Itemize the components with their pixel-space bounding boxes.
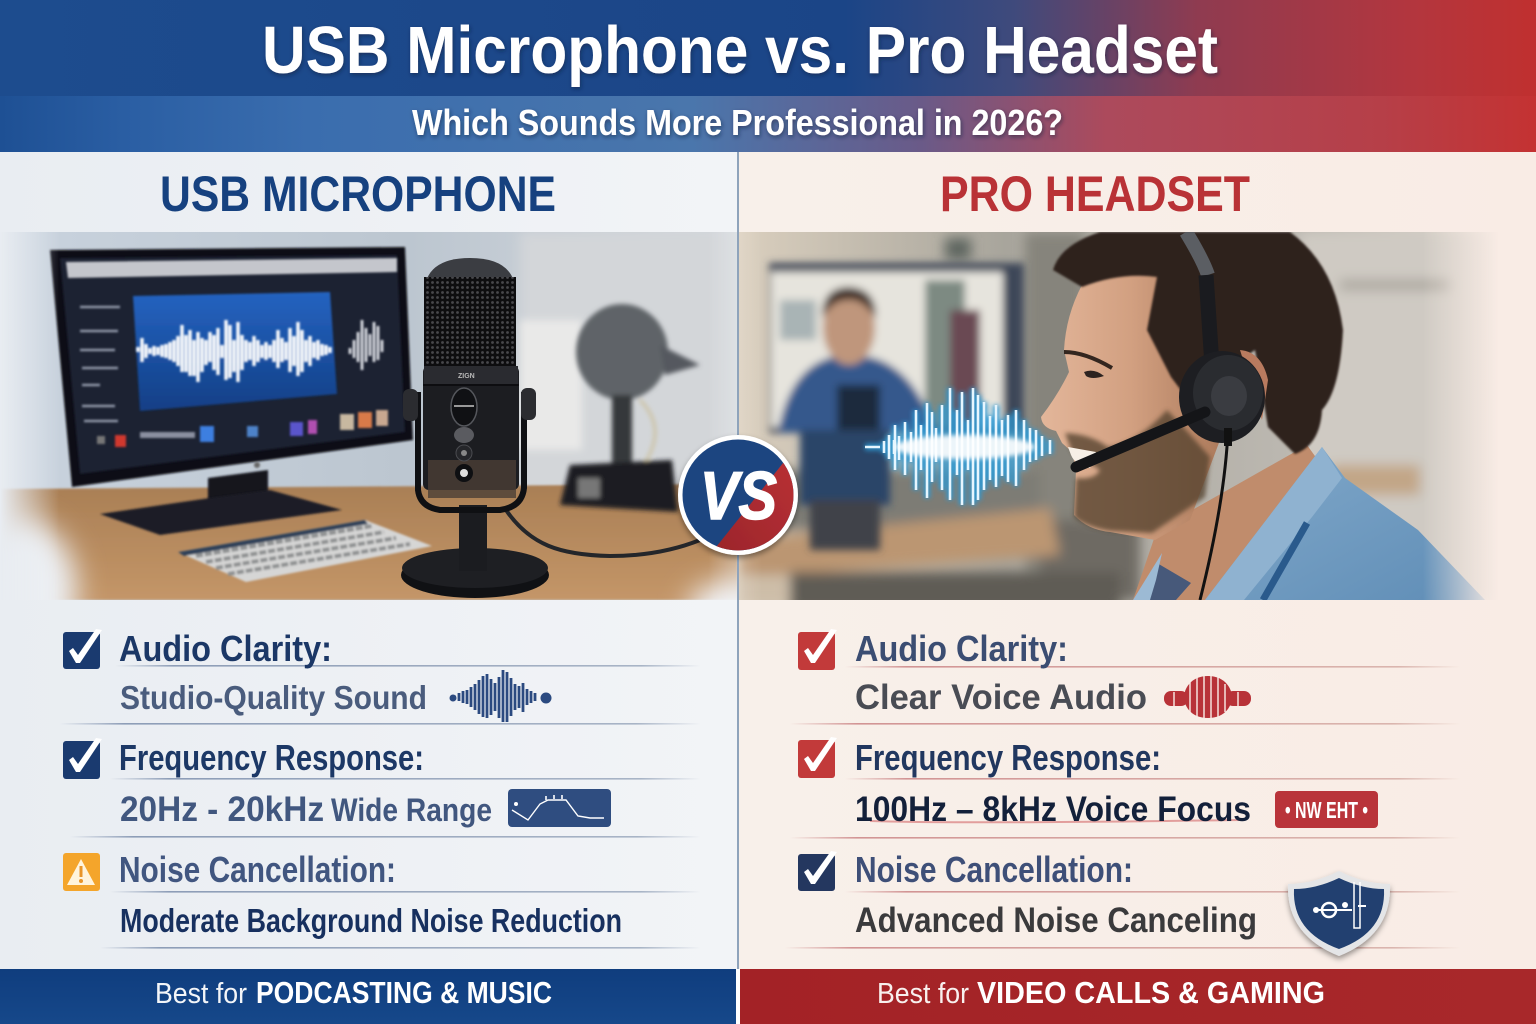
- title: USB Microphone vs. Pro Headset: [262, 13, 1218, 88]
- row: noise cancellation: Advanced Noise Canceling: [855, 901, 1257, 940]
- icon: check: [798, 629, 837, 670]
- icon: check: [798, 737, 837, 778]
- header banner: [0, 0, 1536, 152]
- USB microphone: ZIGN: [458, 373, 475, 380]
- row: frequency response: 100Hz – 8kHz Voice Focus: [855, 790, 1251, 829]
- badge: [1275, 791, 1378, 828]
- panel: Pro headset: [739, 152, 1536, 1024]
- monitor: [50, 247, 413, 535]
- icon: headset: [1076, 232, 1265, 600]
- VS badge: VS: [700, 458, 777, 534]
- footer: best for podcasting and music: [0, 969, 736, 1024]
- row: audio clarity: Studio-Quality Sound: [120, 679, 427, 716]
- panel: USB microphone: [0, 152, 788, 1024]
- subtitle: Which Sounds More Professional in 2026?: [412, 102, 1063, 143]
- icon: shield: [1288, 871, 1390, 956]
- footer: best for podcasting and music: Best for: [155, 978, 247, 1010]
- row: frequency response: Wide Range: [331, 792, 492, 828]
- icon: check: [63, 629, 102, 669]
- sidebar rows: [80, 307, 120, 421]
- side waveform: [350, 320, 382, 370]
- row: audio clarity: [790, 628, 1460, 725]
- row: frequency response: Frequency Response:: [855, 737, 1161, 778]
- footer: best for video calls and gaming: Best for: [877, 978, 969, 1010]
- footer: best for video calls and gaming: VIDEO CALLS & GAMING: [977, 975, 1325, 1010]
- taskbar icons: [97, 410, 388, 468]
- icon: waveform: [451, 670, 535, 722]
- USB microphone: [401, 258, 549, 598]
- VS badge: [678, 435, 803, 561]
- photo: man with headset: [739, 232, 1500, 612]
- photo: microphone at desk: [3, 232, 737, 600]
- voice waveform: [865, 388, 1050, 505]
- row: audio clarity: Audio Clarity:: [119, 628, 332, 669]
- row: frequency response: 20Hz - 20kHz: [120, 790, 324, 829]
- man's hair: [1053, 232, 1343, 454]
- row: noise cancellation: Noise Cancellation:: [855, 849, 1133, 890]
- row: audio clarity: Clear Voice Audio: [855, 678, 1147, 717]
- row: noise cancellation: [785, 849, 1460, 956]
- feature list: Pro headset: [785, 628, 1460, 956]
- ear: [1240, 350, 1268, 420]
- row: noise cancellation: [63, 849, 700, 949]
- icon: warning: [63, 853, 100, 891]
- row: audio clarity: [60, 628, 700, 725]
- row: frequency response: Frequency Response:: [119, 737, 424, 778]
- feature list: USB microphone: [60, 628, 700, 949]
- man's neck and shirt: [1133, 445, 1485, 600]
- icon: frequency chart: [508, 789, 611, 827]
- blurred background microphone: [560, 304, 700, 512]
- footer: best for video calls and gaming: [740, 969, 1536, 1024]
- row: frequency response: [790, 737, 1460, 839]
- icon: red waveform: [1164, 676, 1251, 719]
- heading: USB microphone: USB MICROPHONE: [160, 166, 556, 222]
- heading: Pro headset: PRO HEADSET: [940, 166, 1250, 222]
- beard: [1065, 410, 1210, 533]
- row: noise cancellation: Moderate Background Noise Reduction: [120, 902, 622, 939]
- footer: best for podcasting and music: PODCASTING & MUSIC: [256, 975, 552, 1010]
- man's face: [1041, 270, 1220, 540]
- icon: check: [63, 738, 102, 779]
- cable: [506, 510, 700, 556]
- screen waveform: [138, 320, 330, 382]
- row: frequency response: [63, 737, 700, 838]
- row: audio clarity: Audio Clarity:: [855, 628, 1068, 669]
- row: noise cancellation: Noise Cancellation:: [119, 849, 396, 890]
- icon: check: [798, 851, 837, 891]
- keyboard: [178, 520, 432, 582]
- badge: • NW EHT •: [1285, 797, 1368, 823]
- blurred monitor with remote caller: [769, 263, 1024, 550]
- monitor stand: [208, 470, 268, 506]
- eye and brow: [1064, 352, 1112, 368]
